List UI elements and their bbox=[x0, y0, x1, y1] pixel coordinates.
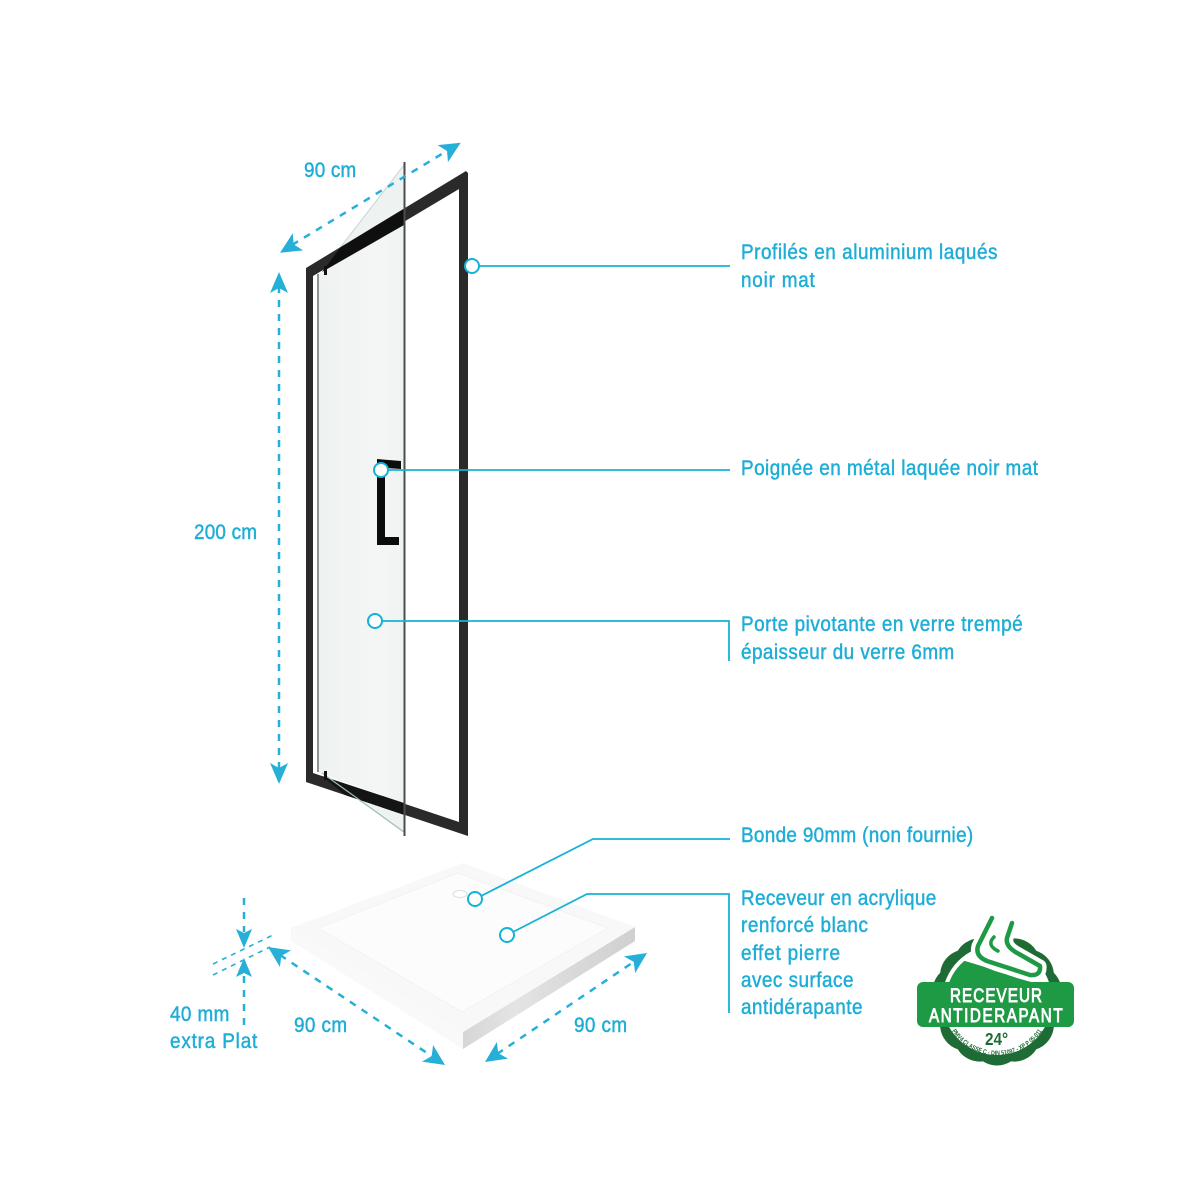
shower tray bbox=[291, 863, 635, 1049]
drain bbox=[453, 890, 467, 898]
tray top bbox=[291, 863, 635, 1032]
label: 90 cm door width: 90 cm bbox=[304, 159, 356, 182]
glass leaf opening top bbox=[338, 165, 404, 250]
foot icon bbox=[977, 918, 1040, 975]
hinge rail bbox=[317, 274, 319, 772]
callout: tray bbox=[500, 894, 729, 1013]
badge: receveur antiderapant: ANTIDERAPANT bbox=[929, 1004, 1063, 1026]
text: glass door bbox=[741, 613, 1023, 664]
label: 40 mm extra plat: extra Plat bbox=[170, 1030, 258, 1053]
text: tray bbox=[741, 887, 936, 1019]
tray left side bbox=[291, 928, 463, 1049]
badge: receveur antiderapant bbox=[917, 916, 1074, 1066]
text: tray: renforcé blanc bbox=[741, 914, 868, 937]
dimension arrow: door width 90 cm bbox=[275, 134, 466, 261]
badge inner bbox=[942, 945, 1052, 1055]
callout: profiles bbox=[465, 259, 730, 273]
frame seen through glass bbox=[322, 209, 404, 272]
label: 90 cm tray width: 90 cm bbox=[574, 1014, 627, 1037]
badge norm text bbox=[952, 1031, 1042, 1055]
label: 40 mm extra plat bbox=[170, 1003, 258, 1053]
label: 200 cm: 200 cm bbox=[194, 521, 257, 544]
badge title: RECEVEUR bbox=[950, 984, 1042, 1006]
callout: handle bbox=[374, 463, 730, 477]
glass edge bbox=[404, 162, 406, 836]
badge: receveur antiderapant: PMV4 CLASSE C - DIN 51097 - XP P 05-011 bbox=[952, 1028, 1042, 1055]
handle bbox=[377, 459, 401, 545]
text: handle: Poignée en métal laquée noir mat bbox=[741, 457, 1038, 480]
dimension arrow: tray width bbox=[479, 945, 653, 1070]
text: profiles bbox=[741, 241, 998, 292]
door glass panel bbox=[319, 225, 404, 803]
label: 40 mm extra plat: 40 mm bbox=[170, 1003, 229, 1026]
shower door bbox=[306, 162, 468, 836]
text: tray: avec surface bbox=[741, 969, 854, 992]
text: tray: effet pierre bbox=[741, 942, 840, 965]
text: drain: Bonde 90mm (non fournie) bbox=[741, 824, 973, 847]
dimension arrow: height 200 cm bbox=[270, 272, 288, 784]
text: tray: antidérapante bbox=[741, 996, 863, 1019]
callout: drain bbox=[468, 839, 730, 906]
glass leaf opening bottom bbox=[359, 800, 404, 832]
text: profiles: Profilés en aluminium laqués bbox=[741, 241, 998, 264]
black frame bbox=[306, 171, 468, 836]
dimension arrow: tray thickness bbox=[213, 898, 273, 1028]
dimension arrow: tray depth bbox=[262, 939, 451, 1073]
badge banner bbox=[917, 982, 1074, 1027]
text: glass door: Porte pivotante en verre trempé bbox=[741, 613, 1023, 636]
badge scalloped disc bbox=[932, 935, 1062, 1065]
text: glass door: épaisseur du verre 6mm bbox=[741, 641, 954, 664]
callout: glass door bbox=[368, 614, 729, 661]
text: profiles: noir mat bbox=[741, 269, 815, 292]
tray right side bbox=[463, 927, 635, 1049]
text: tray: Receveur en acrylique bbox=[741, 887, 936, 910]
badge hill bbox=[949, 960, 1032, 982]
label: 90 cm tray depth: 90 cm bbox=[294, 1014, 347, 1037]
badge angle: 24° bbox=[985, 1029, 1008, 1049]
inner basin bbox=[318, 873, 608, 1012]
